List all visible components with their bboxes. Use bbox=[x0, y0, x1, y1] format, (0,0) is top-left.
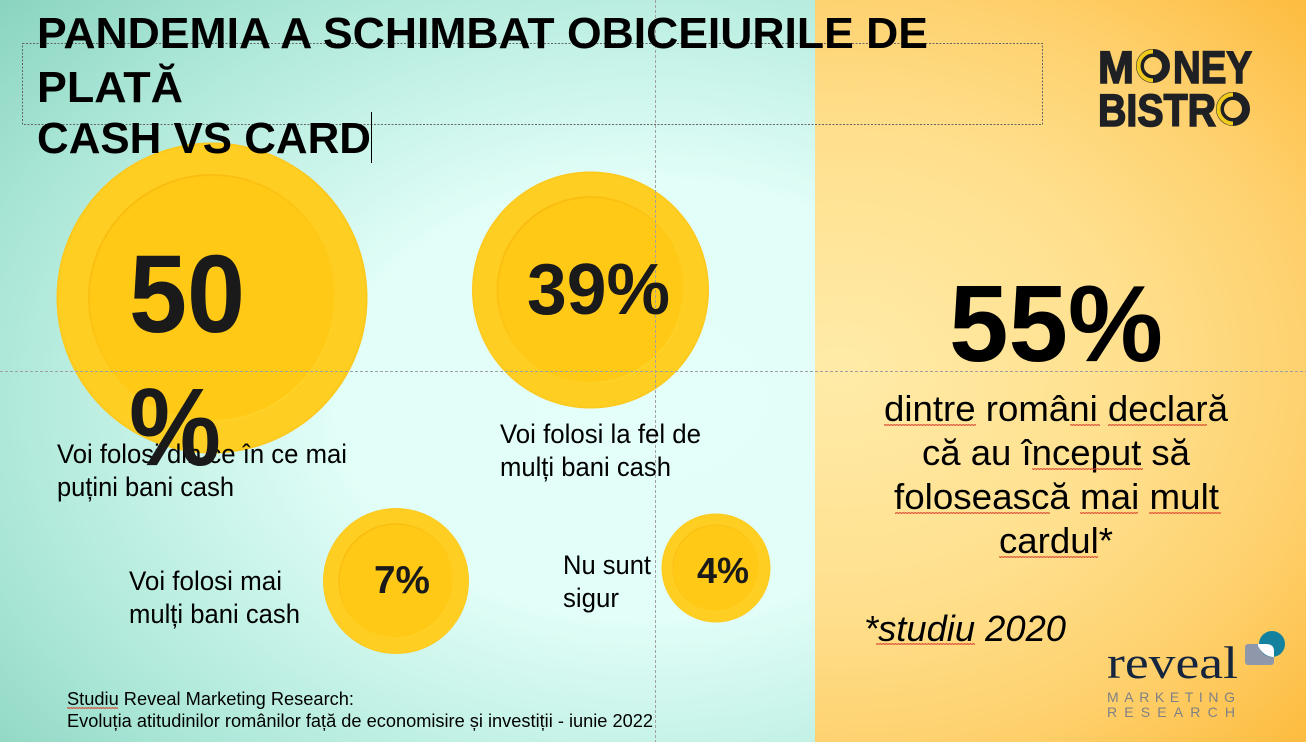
text: card usage statement bbox=[884, 388, 1229, 561]
logo: Money Bistro: M bbox=[1098, 42, 1134, 93]
coin: 39% bbox=[472, 172, 709, 408]
label: 4% group: Nu sunt bbox=[563, 550, 652, 580]
label: 39% group: mulți bani cash bbox=[500, 452, 671, 482]
text: study note: *studiu 2020 bbox=[864, 608, 1066, 649]
coin: 50% bbox=[56, 142, 368, 454]
source note: Studiu Reveal Marketing Research: bbox=[67, 689, 354, 709]
number: 55%: 55% bbox=[949, 263, 1163, 385]
number: 4%: 4% bbox=[697, 550, 749, 591]
number: 50%: 50 bbox=[129, 233, 245, 356]
label: 7% group bbox=[129, 566, 300, 629]
coin: 4% bbox=[662, 514, 770, 622]
title: PANDEMIA A SCHIMBAT OBICEIURILE DE bbox=[37, 9, 928, 58]
label: 39% group: Voi folosi la fel de bbox=[500, 419, 701, 449]
label: 7% group: mulți bani cash bbox=[129, 599, 300, 629]
text: card usage statement: dintre români declară bbox=[884, 388, 1229, 429]
number: 7%: 7% bbox=[374, 559, 430, 602]
label: 39% group bbox=[500, 419, 701, 482]
logo: Reveal Marketing Research bbox=[1107, 631, 1285, 720]
coin: 7% bbox=[323, 508, 469, 654]
text: card usage statement: că au început să bbox=[922, 432, 1191, 473]
title bbox=[37, 9, 928, 163]
text: card usage statement: cardul* bbox=[999, 520, 1113, 561]
logo: Money Bistro: BISTR bbox=[1098, 85, 1216, 136]
logo: Reveal Marketing Research: RESEARCH bbox=[1107, 704, 1235, 720]
label: 4% group bbox=[563, 550, 652, 613]
title: PLATĂ bbox=[37, 62, 183, 112]
number: 50% bbox=[129, 233, 245, 489]
panel: teal background bbox=[0, 0, 815, 742]
label: 50% group second line: puțini bani cash bbox=[57, 472, 234, 502]
label: 7% group: Voi folosi mai bbox=[129, 566, 282, 596]
source note bbox=[67, 689, 653, 731]
title: CASH VS CARD bbox=[37, 114, 371, 163]
spell-check underlines bbox=[67, 424, 1221, 709]
logo: Reveal Marketing Research: reveal bbox=[1107, 637, 1238, 688]
logo: Reveal Marketing Research: MARKETING bbox=[1107, 689, 1235, 705]
logo: Money Bistro bbox=[1098, 42, 1252, 136]
number: 39%: 39% bbox=[527, 250, 670, 330]
panel: yellow background bbox=[815, 0, 1306, 742]
text: card usage statement: folosească mai mult bbox=[894, 476, 1219, 517]
label: 4% group: sigur bbox=[563, 583, 619, 613]
logo: Money Bistro: NEY bbox=[1173, 42, 1252, 93]
source note: Evoluția atitudinilor românilor față de economisire și investiții - iunie 2022 bbox=[67, 711, 653, 731]
number: 50%: % bbox=[129, 366, 221, 489]
label: 50% group: Voi folosi din ce în ce mai bbox=[57, 439, 347, 469]
